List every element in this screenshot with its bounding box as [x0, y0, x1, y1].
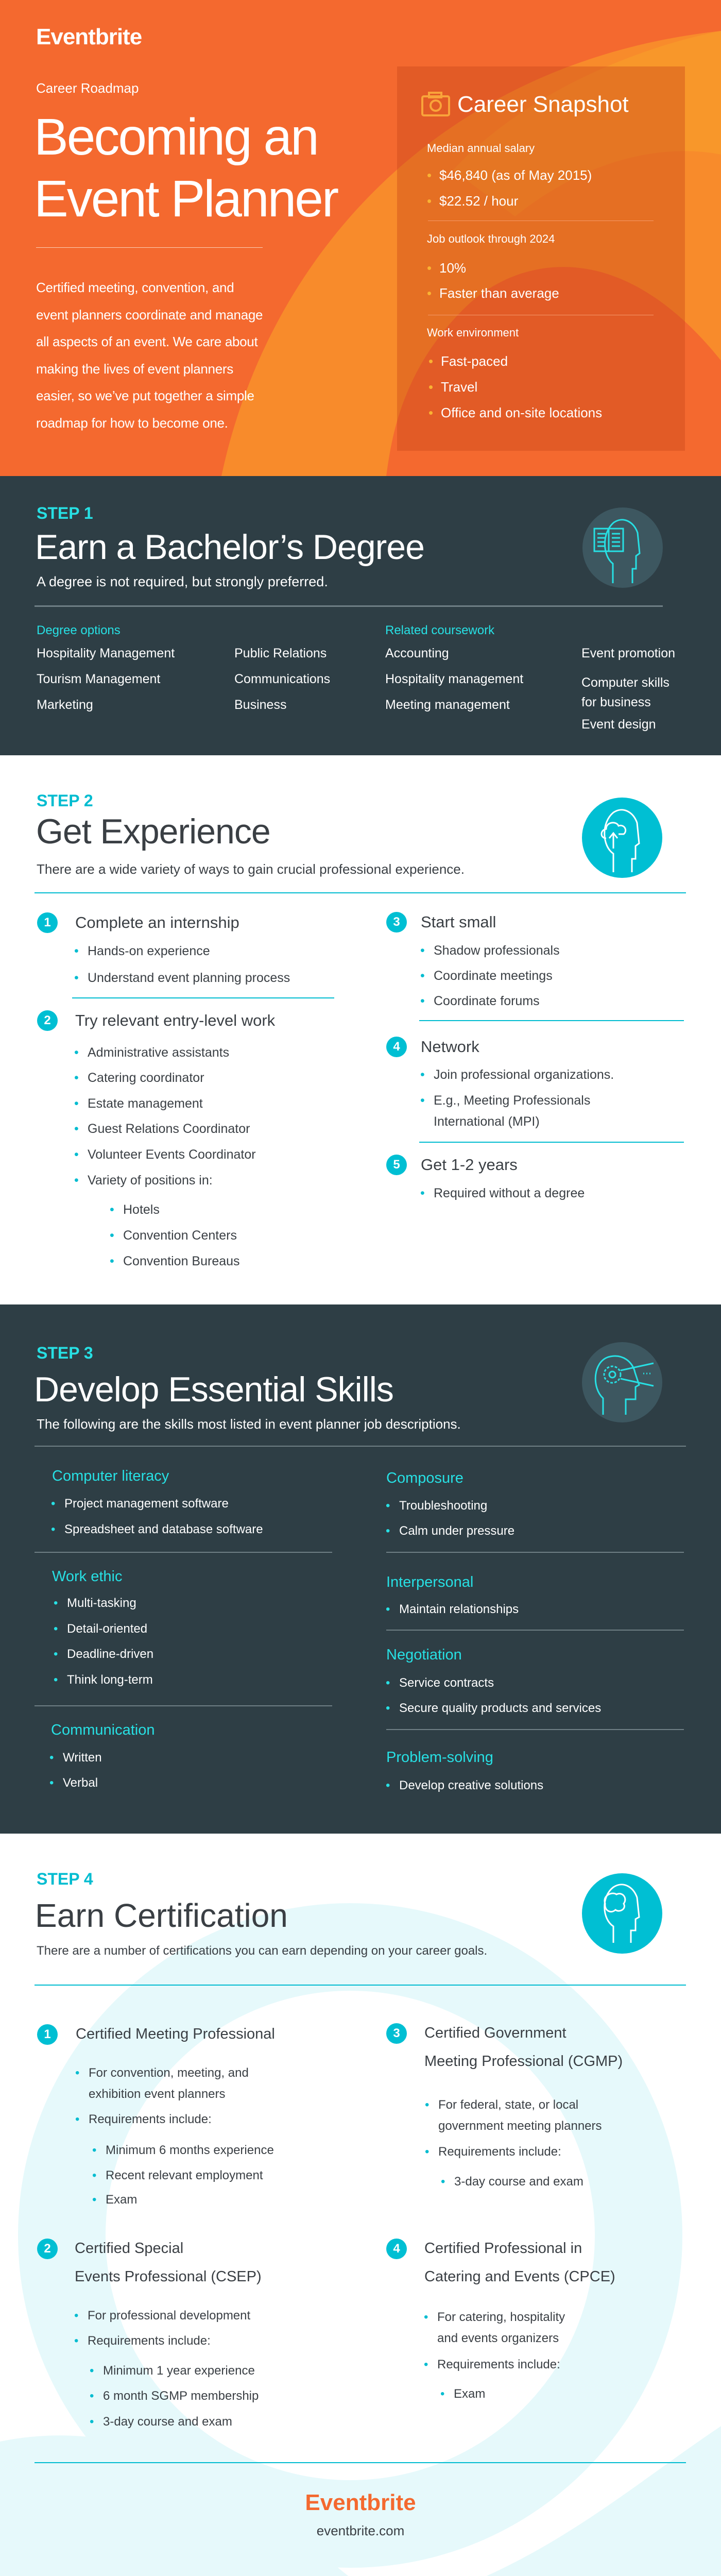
step 3 section: Think long-term	[67, 1673, 153, 1687]
item 3	[386, 912, 560, 1008]
intro paragraph: all aspects of an event. We care about	[36, 334, 258, 349]
step 4 section: 3-day course and exam	[454, 2175, 583, 2189]
eyebrow: Career Roadmap	[36, 80, 139, 96]
step 1 section: Tourism Management	[37, 672, 160, 686]
step 2 section: 5	[393, 1158, 400, 1172]
step 4 section: Certified Special	[75, 2240, 183, 2257]
step 4 section: Requirements include:	[89, 2112, 212, 2126]
step 1 section: Meeting management	[385, 698, 510, 712]
step 2 section: Variety of positions in:	[88, 1173, 213, 1188]
skill: composure	[386, 1470, 514, 1538]
step 3 section: Composure	[386, 1470, 464, 1486]
step 3 section: Project management software	[64, 1497, 229, 1511]
icon: head with cloud	[582, 798, 662, 878]
related coursework	[385, 623, 675, 732]
step 3 section: Deadline-driven	[67, 1647, 153, 1661]
step 3 section	[0, 1304, 721, 1834]
panel: career snapshot: Median annual salary	[427, 142, 535, 155]
skill: negotiation	[386, 1647, 601, 1715]
step 4 section: Requirements include:	[88, 2334, 211, 2348]
step 1 section: Accounting	[385, 646, 449, 660]
step 1 section: Computer skills	[581, 675, 670, 690]
step 2 section: Complete an internship	[75, 913, 239, 931]
subtitle: There are a wide variety of ways to gain crucial professional experience.	[37, 861, 465, 877]
step 3 section: Develop creative solutions	[399, 1778, 543, 1792]
step 2 section: Try relevant entry-level work	[75, 1011, 275, 1029]
panel: career snapshot: Travel	[441, 379, 477, 395]
step 3 section: Secure quality products and services	[399, 1701, 601, 1715]
title	[34, 108, 338, 228]
icon: head with brain	[582, 1873, 662, 1954]
intro paragraph: event planners coordinate and manage	[36, 307, 263, 323]
step 4 section: For federal, state, or local	[438, 2098, 578, 2112]
step 3 section: Computer literacy	[52, 1468, 169, 1484]
step 3 section: Work ethic	[52, 1568, 122, 1585]
step 2 section: Hotels	[123, 1202, 160, 1217]
skill: computer literacy	[52, 1468, 263, 1536]
heading: Earn a Bachelor’s Degree	[35, 528, 424, 567]
cert 4	[386, 2239, 615, 2401]
icon: head with gear	[582, 1342, 662, 1422]
cert 1	[37, 2024, 275, 2207]
subtitle: There are a number of certifications you can earn depending on your career goals.	[37, 1944, 487, 1958]
footer url: eventbrite.com	[317, 2523, 404, 2538]
step 3 section: Multi-tasking	[67, 1596, 136, 1610]
step 1 section: Degree options	[37, 623, 121, 637]
step 4 section: Minimum 6 months experience	[106, 2143, 274, 2157]
subtitle: The following are the skills most listed in event planner job descriptions.	[37, 1416, 461, 1432]
step 2 section: Shadow professionals	[434, 943, 560, 958]
step 4 section: Requirements include:	[437, 2358, 560, 2371]
title: Event Planner	[34, 170, 337, 228]
step 3 section: Communication	[51, 1722, 154, 1738]
step 4 section: Meeting Professional (CGMP)	[424, 2053, 623, 2070]
step 2 section: Network	[421, 1038, 479, 1056]
step 4 section: Catering and Events (CPCE)	[424, 2268, 615, 2285]
step 1 section: Business	[234, 698, 286, 712]
step 4 section	[0, 1834, 721, 2576]
step 4 section: For professional development	[88, 2309, 250, 2323]
step 4 section: 2	[44, 2242, 51, 2256]
title: Becoming an	[34, 108, 318, 166]
step 3 section: Troubleshooting	[399, 1499, 487, 1513]
step 4 section: Events Professional (CSEP)	[75, 2268, 262, 2285]
intro paragraph: roadmap for how to become one.	[36, 415, 228, 431]
skill: interpersonal	[386, 1574, 519, 1616]
step 2 section: Estate management	[88, 1096, 203, 1111]
step 2 section: Get 1-2 years	[421, 1156, 518, 1174]
step 3 section: Maintain relationships	[399, 1602, 519, 1616]
step 1 section: Event promotion	[581, 646, 675, 660]
panel: career snapshot: Faster than average	[439, 285, 559, 301]
step 1 section: Hospitality management	[385, 672, 523, 686]
step 2 section: 2	[44, 1013, 51, 1027]
step 2 section: Required without a degree	[434, 1186, 585, 1200]
intro paragraph: Certified meeting, convention, and	[36, 280, 234, 295]
step 4 section: Recent relevant employment	[106, 2168, 263, 2182]
step 1 section	[0, 476, 721, 755]
step 2 section: E.g., Meeting Professionals	[434, 1093, 590, 1108]
background swirl	[221, 31, 721, 476]
step 4 section: 6 month SGMP membership	[103, 2389, 259, 2403]
panel: career snapshot: $46,840 (as of May 2015)	[439, 167, 592, 183]
step 1 section: Communications	[234, 672, 330, 686]
step 3 section: Problem-solving	[386, 1749, 493, 1766]
step 2 section: 3	[393, 915, 400, 929]
step 1 section: Marketing	[37, 698, 93, 712]
cert 3	[386, 2023, 623, 2189]
heading: Develop Essential Skills	[34, 1370, 393, 1409]
heading: Earn Certification	[35, 1897, 288, 1934]
step 2 section: Coordinate forums	[434, 994, 540, 1008]
step 3 section: Negotiation	[386, 1647, 462, 1663]
panel: career snapshot	[397, 66, 685, 451]
panel: career snapshot: $22.52 / hour	[439, 193, 518, 209]
step 1 section: Hospitality Management	[37, 646, 175, 660]
header section	[0, 0, 721, 476]
step 4 section: Exam	[106, 2193, 137, 2207]
step 2 section: Convention Bureaus	[123, 1254, 240, 1268]
step 2 section: International (MPI)	[434, 1114, 540, 1129]
step 1 section: for business	[581, 695, 651, 709]
logo: Eventbrite	[36, 24, 142, 49]
step 2 section: 1	[44, 916, 51, 929]
panel: career snapshot: 10%	[439, 260, 466, 276]
panel: career snapshot: Office and on-site locations	[441, 405, 602, 420]
background swirl	[0, 1903, 721, 2576]
step 4 section: Minimum 1 year experience	[103, 2364, 255, 2378]
step 4 section: 1	[44, 2027, 51, 2041]
step 2 section: Guest Relations Coordinator	[88, 1122, 250, 1136]
skill: communication	[49, 1722, 154, 1790]
degree options	[37, 623, 330, 712]
step 4 section: exhibition event planners	[89, 2087, 226, 2101]
step 2 section: Administrative assistants	[88, 1045, 229, 1060]
step 3 section: Service contracts	[399, 1676, 494, 1690]
step 2 section	[0, 755, 721, 1304]
skill: problem-solving	[386, 1749, 543, 1792]
step label: STEP 3	[37, 1344, 93, 1362]
step label: STEP 2	[37, 791, 93, 810]
step 4 section: government meeting planners	[438, 2119, 602, 2133]
step 4 section: Certified Meeting Professional	[76, 2026, 275, 2042]
panel: career snapshot: Fast-paced	[441, 353, 508, 369]
step 2 section: Join professional organizations.	[434, 1067, 614, 1082]
step 4 section: For catering, hospitality	[437, 2310, 565, 2324]
snapshot heading: Career Snapshot	[457, 92, 629, 117]
item 1	[37, 912, 290, 985]
intro paragraph: making the lives of event planners	[36, 361, 233, 376]
item 2	[37, 1010, 275, 1268]
item 5	[386, 1155, 585, 1200]
step label: STEP 4	[37, 1870, 93, 1888]
step 1 section: Related coursework	[385, 623, 494, 637]
intro paragraph: easier, so we’ve put together a simple	[36, 388, 254, 403]
step 2 section: Coordinate meetings	[434, 969, 553, 983]
step 4 section: Requirements include:	[438, 2145, 561, 2159]
step 3 section: Detail-oriented	[67, 1622, 147, 1636]
step 3 section: Spreadsheet and database software	[64, 1522, 263, 1536]
step 2 section: Understand event planning process	[88, 971, 290, 985]
icon: camera	[421, 92, 450, 116]
step 2 section: Start small	[421, 913, 496, 931]
step 4 section: Exam	[454, 2387, 485, 2401]
step 4 section: For convention, meeting, and	[89, 2066, 249, 2080]
step label: STEP 1	[37, 504, 93, 522]
item 4	[386, 1037, 614, 1129]
step 4 section: Certified Professional in	[424, 2240, 582, 2257]
step 2 section: Hands-on experience	[88, 944, 210, 958]
step 4 section: 3-day course and exam	[103, 2415, 232, 2429]
step 1 section: Event design	[581, 717, 656, 732]
step 2 section: Convention Centers	[123, 1228, 237, 1243]
step 2 section: Catering coordinator	[88, 1071, 204, 1085]
step 3 section: Calm under pressure	[399, 1524, 514, 1538]
step 1 section: Public Relations	[234, 646, 327, 660]
step 3 section: Verbal	[63, 1776, 98, 1790]
step 4 section: Certified Government	[424, 2025, 566, 2041]
step 3 section: Interpersonal	[386, 1574, 473, 1590]
step 4 section: and events organizers	[437, 2331, 559, 2345]
subtitle: A degree is not required, but strongly preferred.	[37, 574, 328, 589]
step 3 section: Written	[63, 1751, 102, 1765]
intro paragraph	[36, 280, 263, 431]
panel: career snapshot: Job outlook through 2024	[427, 232, 555, 245]
step 2 section: Volunteer Events Coordinator	[88, 1147, 256, 1162]
panel: career snapshot: Work environment	[427, 326, 519, 339]
footer logo: Eventbrite	[305, 2490, 416, 2515]
step 4 section: 4	[393, 2242, 400, 2256]
step 2 section: 4	[393, 1040, 400, 1054]
icon: head with book	[582, 507, 663, 588]
heading: Get Experience	[36, 812, 270, 851]
skill: work ethic	[52, 1568, 153, 1687]
step 4 section: 3	[393, 2026, 400, 2040]
cert 2	[37, 2239, 262, 2429]
